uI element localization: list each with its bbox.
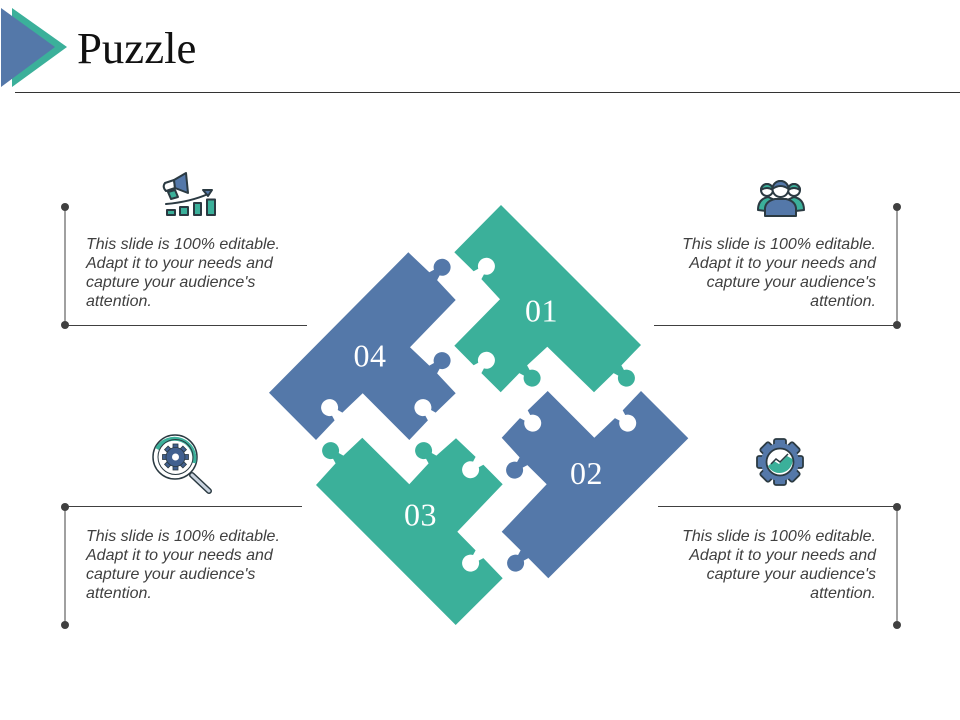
puzzle piece 01: [454, 205, 641, 392]
puzzle piece 03: 03: [404, 496, 437, 532]
text block: top right: capture your audience's: [707, 274, 876, 291]
text block: bottom left: [85, 528, 280, 602]
text block: top left: attention.: [86, 293, 152, 310]
text block: bottom right: capture your audience's: [707, 566, 876, 583]
callout bracket: bottom right: [658, 503, 901, 629]
text block: bottom left: This slide is 100% editable.: [86, 528, 280, 545]
callout bracket: top right: [654, 203, 901, 329]
callout bracket: bottom left: [61, 503, 302, 629]
text block: top left: This slide is 100% editable.: [86, 236, 280, 253]
title: Puzzle: [77, 23, 196, 73]
text block: top left: Adapt it to your needs and: [85, 255, 274, 272]
text block: bottom left: attention.: [86, 585, 152, 602]
text block: bottom right: Adapt it to your needs and: [688, 547, 877, 564]
puzzle piece 03: [316, 438, 503, 625]
text block: top left: capture your audience's: [86, 274, 255, 291]
text block: top right: This slide is 100% editable.: [682, 236, 876, 253]
header rule: [15, 92, 960, 94]
text block: top right: attention.: [810, 293, 876, 310]
text block: top right: Adapt it to your needs and: [688, 255, 877, 272]
icon: gear with growth chart: [757, 439, 803, 485]
text block: bottom right: [682, 528, 877, 602]
text block: bottom left: Adapt it to your needs and: [85, 547, 274, 564]
puzzle piece 02: 02: [570, 455, 603, 491]
text block: bottom right: attention.: [810, 585, 876, 602]
text block: top left: [85, 236, 280, 310]
callout bracket: top left: [61, 203, 307, 329]
text block: bottom left: capture your audience's: [86, 566, 255, 583]
text block: bottom right: This slide is 100% editable.: [682, 528, 876, 545]
header arrow icon: [1, 8, 67, 87]
icon: megaphone and growth bars: [164, 173, 215, 215]
puzzle piece 01: 01: [525, 292, 558, 328]
puzzle piece 04: 04: [354, 338, 386, 374]
text block: top right: [682, 236, 877, 310]
icon: team of people: [758, 181, 804, 216]
icon: magnifier with gear: [153, 435, 209, 491]
puzzle piece 04: [269, 252, 456, 440]
puzzle piece 02: [502, 391, 688, 578]
